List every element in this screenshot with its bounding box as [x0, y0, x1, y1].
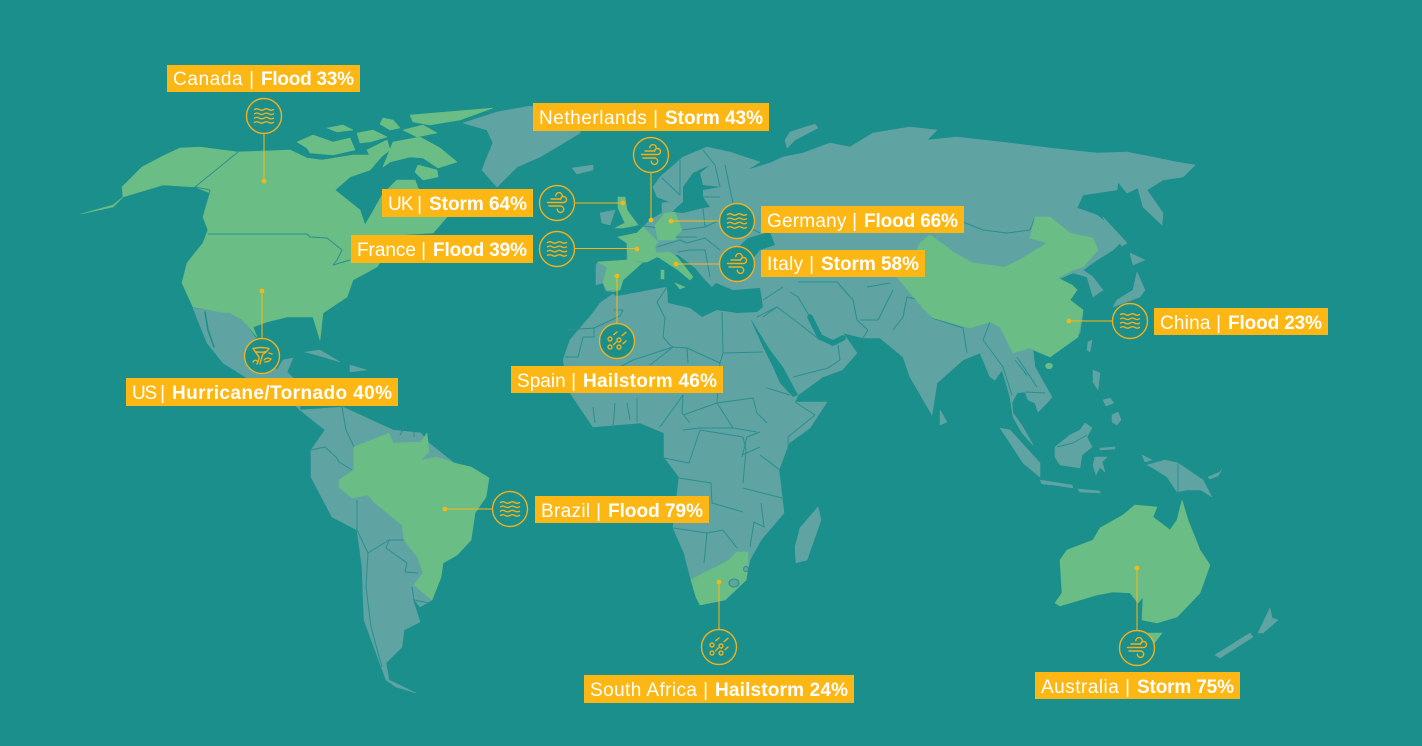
land: islands and the Americas [193, 106, 1278, 693]
Italy [655, 252, 693, 289]
callout: Italy: Italy | [767, 254, 814, 275]
callout: Australia: Australia | [1041, 677, 1130, 698]
callout: France: France | [357, 240, 426, 261]
UK [615, 197, 638, 228]
callout: France: Flood 39% [433, 240, 527, 261]
callout: Spain: Hailstorm 46% [583, 371, 717, 392]
Greenland [463, 106, 582, 187]
callout: Netherlands [533, 103, 769, 222]
callout: Netherlands: Storm 43% [665, 108, 763, 129]
callout: Australia: Storm 75% [1137, 677, 1234, 698]
Brazil [339, 433, 489, 600]
Canada and US [81, 108, 493, 340]
callout: Brazil [443, 492, 709, 526]
callout: Italy: Storm 58% [821, 254, 919, 275]
callout: France [351, 232, 639, 266]
world map [81, 106, 1278, 693]
Mediterranean Sea [612, 255, 763, 317]
callout: Canada: Flood 33% [261, 69, 354, 90]
callout: US: US | [132, 383, 165, 404]
France [618, 227, 658, 262]
Baltic Sea [672, 165, 720, 213]
callout: Germany: Flood 66% [864, 211, 958, 232]
callout: South Africa: South Africa | [590, 680, 708, 701]
Persian Gulf [810, 317, 843, 343]
callout: South Africa [584, 580, 854, 703]
callout: Canada: Canada | [173, 69, 254, 90]
callout: Spain: Spain | [517, 371, 576, 392]
Australia [1055, 500, 1210, 645]
callout: Netherlands: Netherlands | [539, 108, 658, 129]
callout: UK [382, 186, 625, 220]
callout: Spain [511, 274, 723, 393]
South Africa [691, 552, 748, 605]
Spain [598, 260, 642, 290]
callout: Germany [669, 204, 964, 238]
callout: China: Flood 23% [1228, 313, 1322, 334]
callout: Canada [167, 65, 360, 183]
callout: US: Hurricane/Tornado 40% [172, 383, 392, 404]
highlighted countries [81, 108, 1210, 645]
callout: UK: Storm 64% [429, 194, 527, 215]
callout: Brazil: Flood 79% [608, 501, 703, 522]
callout: South Africa: Hailstorm 24% [715, 680, 848, 701]
callout: Brazil: Brazil | [541, 501, 601, 522]
callout: China [1067, 304, 1328, 338]
callout: China: China | [1160, 313, 1221, 334]
callout: UK: UK | [388, 194, 422, 215]
Red Sea [750, 318, 798, 397]
China [897, 217, 1098, 369]
Black Sea [735, 232, 775, 262]
land: Eurasia and Africa [563, 127, 1195, 605]
callout: Australia [1035, 566, 1240, 699]
callout: US [126, 289, 398, 406]
country borders [250, 150, 1178, 667]
Germany [655, 212, 682, 240]
callout: Italy [674, 246, 925, 282]
callout: Germany: Germany | [767, 211, 857, 232]
